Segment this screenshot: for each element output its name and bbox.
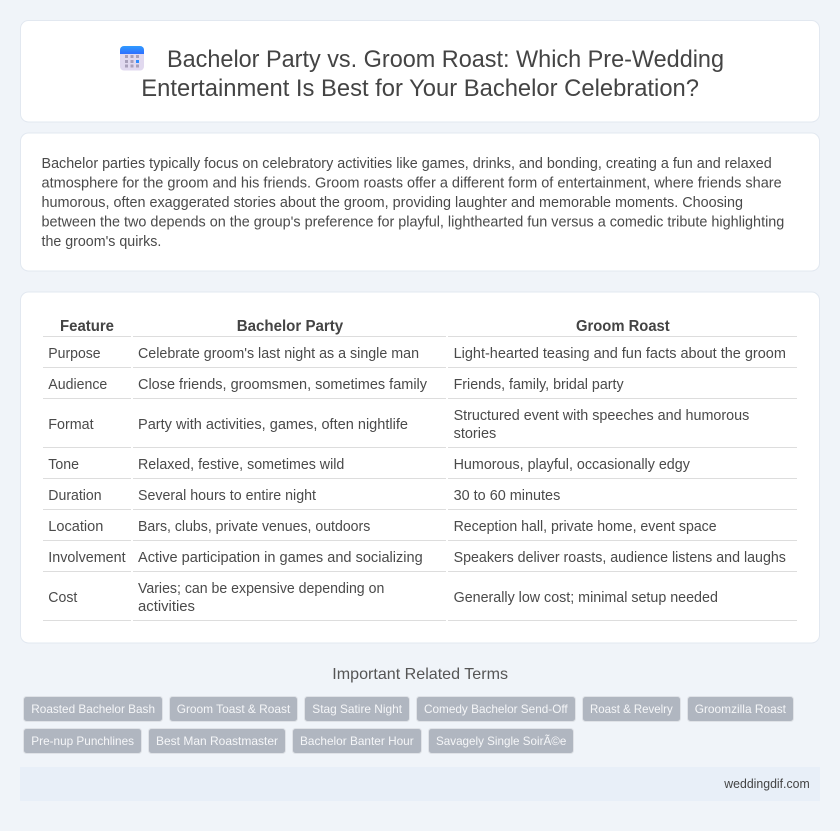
panel: comparison table	[20, 292, 820, 643]
tags: related terms: Stag Satire Night	[312, 702, 403, 716]
row: purpose	[48, 346, 786, 362]
row: audience: Close friends, groomsmen, sometimes family	[138, 377, 428, 393]
footer: weddingdif.com	[723, 776, 810, 791]
footer	[20, 767, 820, 801]
table header: Groom Roast	[576, 318, 670, 335]
row: cost: Varies; can be expensive depending on	[138, 581, 384, 597]
row: tone: Humorous, playful, occasionally edgy	[454, 457, 691, 473]
tags: related terms	[24, 696, 794, 754]
row: format: stories	[454, 426, 496, 442]
table header: Bachelor Party	[237, 318, 343, 335]
text block: description: atmosphere for the groom and his friends. Groom roasts offer a different form of entertainment, where friends share	[42, 176, 782, 192]
row: cost: Cost	[48, 590, 77, 606]
panel: header	[20, 20, 820, 122]
text block: description: the groom's quirks.	[42, 234, 161, 250]
tags: related terms: Bachelor Banter Hour	[300, 734, 414, 748]
title: Bachelor Party vs. Groom Roast: Which Pre-Wedding	[167, 46, 724, 73]
tags: related terms: Savagely Single SoirÃ©e	[436, 734, 567, 748]
row: location: Location	[48, 519, 103, 535]
tags: related terms: Pre-nup Punchlines	[31, 734, 134, 748]
text block: description: humorous, often exaggerated stories about the groom, providing laughter and memorable moments. Choosing	[42, 195, 743, 211]
row: audience	[48, 377, 624, 393]
row: purpose: Celebrate groom's last night as a single man	[138, 346, 419, 362]
table header: Feature	[60, 318, 114, 335]
row: tone: Relaxed, festive, sometimes wild	[138, 457, 344, 473]
row: involvement	[48, 550, 786, 566]
row: location	[48, 519, 717, 535]
row: audience: Friends, family, bridal party	[454, 377, 624, 393]
tags: related terms: Best Man Roastmaster	[156, 734, 278, 748]
text block: description	[42, 156, 784, 250]
row: cost: Generally low cost; minimal setup needed	[454, 590, 718, 606]
row: tone	[48, 457, 691, 473]
row: format: Format	[48, 417, 94, 433]
row: cost: activities	[138, 599, 195, 615]
tags: related terms: Roasted Bachelor Bash	[31, 702, 155, 716]
icon: calendar	[120, 46, 144, 70]
row: audience: Audience	[48, 377, 107, 393]
row: purpose: Light-hearted teasing and fun facts about the groom	[454, 346, 786, 362]
row: location: Bars, clubs, private venues, outdoors	[138, 519, 370, 535]
text block: description: between the two depends on the group's preference for playful, lighthearted fun versus a comedic tribute highlighting	[42, 214, 784, 230]
tags: related terms: Groom Toast & Roast	[177, 702, 291, 716]
row: purpose: Purpose	[48, 346, 101, 362]
tags: related terms: Comedy Bachelor Send-Off	[424, 702, 568, 716]
row: duration	[48, 488, 560, 504]
row: involvement: Active participation in games and socializing	[138, 550, 423, 566]
row: format: Party with activities, games, often nightlife	[138, 417, 408, 433]
row: format: Structured event with speeches and humorous	[454, 408, 749, 424]
row: cost	[48, 581, 718, 615]
row: involvement: Involvement	[48, 550, 126, 566]
panel: description	[20, 133, 820, 271]
row: duration: Duration	[48, 488, 102, 504]
row: location: Reception hall, private home, event space	[454, 519, 717, 535]
table header	[60, 318, 670, 335]
row: format	[48, 408, 749, 442]
heading: related terms: Important Related Terms	[332, 666, 508, 683]
title: Entertainment Is Best for Your Bachelor Celebration?	[141, 75, 699, 102]
row: duration: Several hours to entire night	[138, 488, 316, 504]
tags: related terms: Groomzilla Roast	[695, 702, 787, 716]
title	[141, 46, 724, 102]
row: duration: 30 to 60 minutes	[454, 488, 560, 504]
row: tone: Tone	[48, 457, 79, 473]
row: involvement: Speakers deliver roasts, audience listens and laughs	[454, 550, 786, 566]
text block: description: Bachelor parties typically focus on celebratory activities like games, drinks, and bonding, creating a fun and relaxed	[42, 156, 772, 172]
tags: related terms: Roast & Revelry	[590, 702, 673, 716]
